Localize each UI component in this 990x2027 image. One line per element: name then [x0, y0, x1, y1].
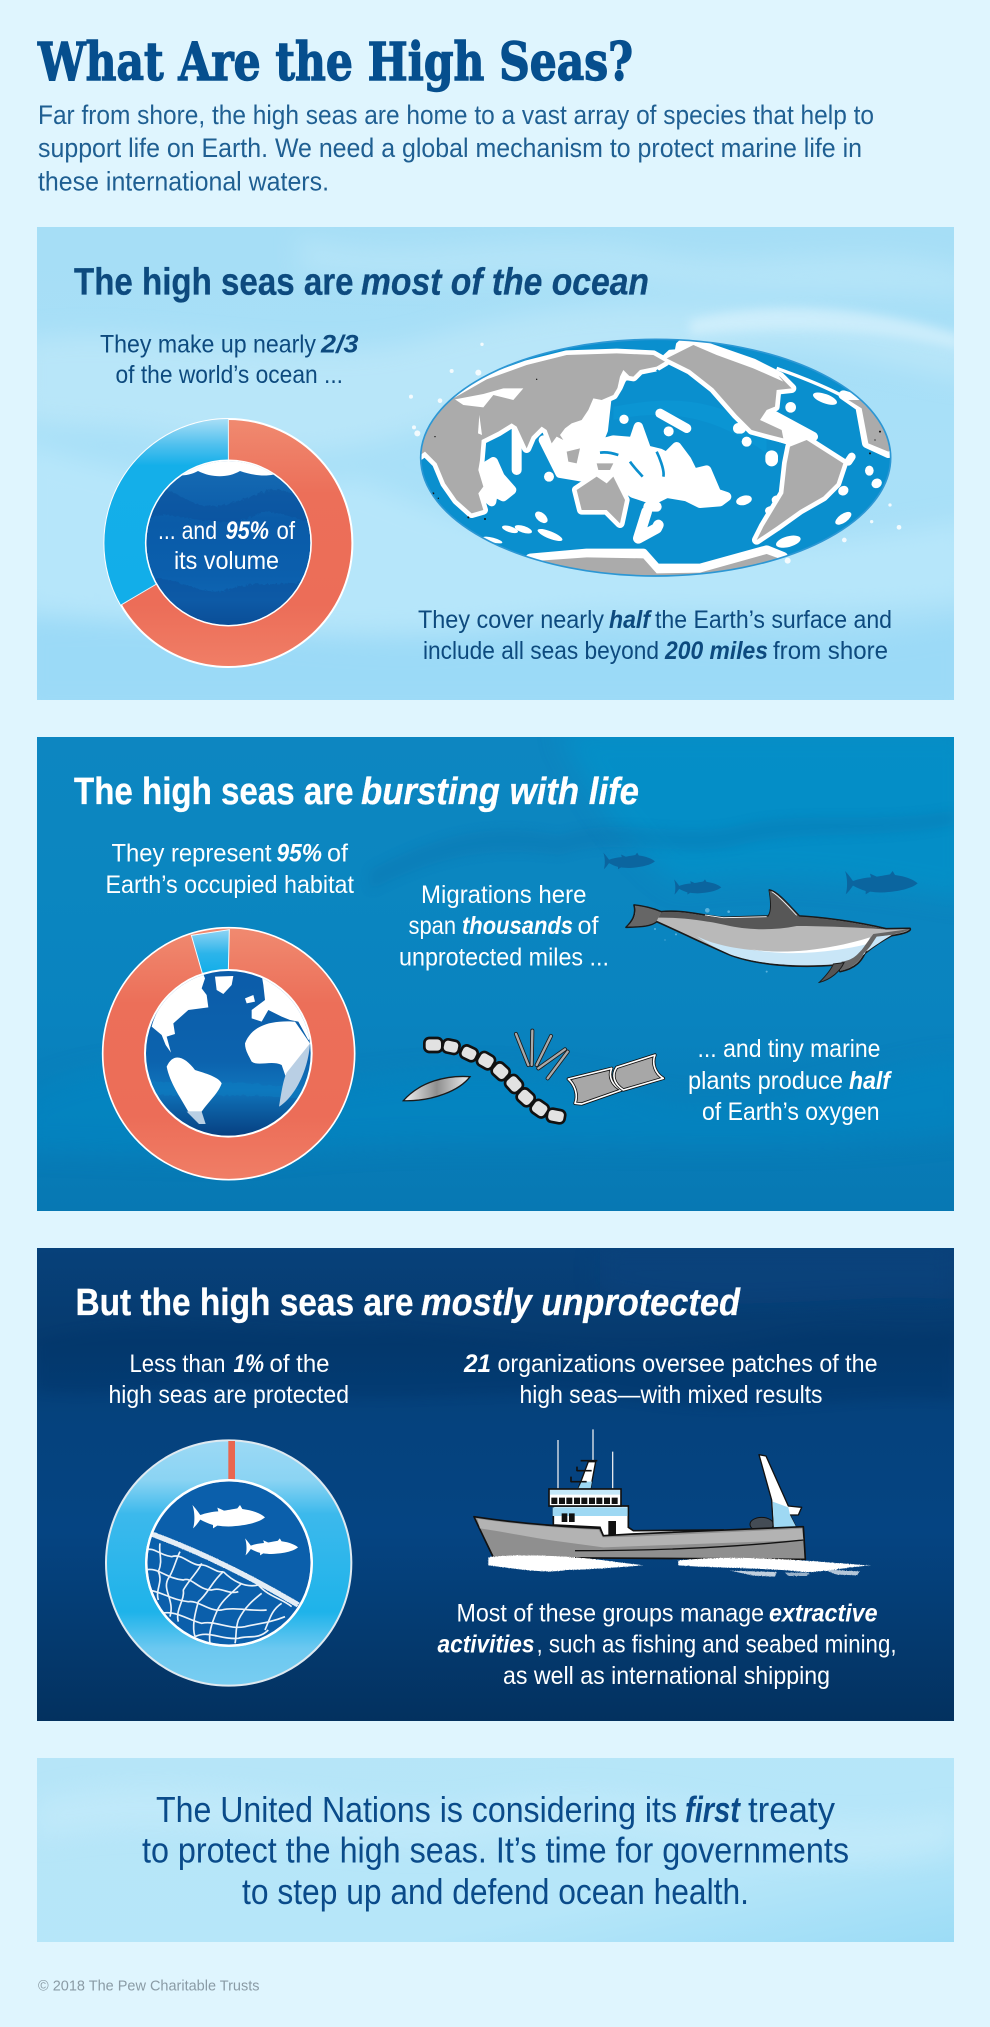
text: two thirds [100, 330, 359, 389]
text: less than 1%: high seas are protected [108, 1381, 349, 1409]
intro text [38, 100, 874, 196]
text: volume: its volume [174, 547, 279, 575]
text: occupied habitat [106, 840, 354, 899]
text: volume: 95% [226, 517, 269, 545]
text: extractive activities: extractive [769, 1600, 878, 1628]
text: tiny marine plants: of Earth’s oxygen [702, 1098, 880, 1126]
text: extractive activities: , such as fishing and seabed mining, [536, 1630, 896, 1658]
text: half the surface: from shore [773, 637, 888, 665]
panel: most of the ocean [20, 227, 970, 710]
diatom chain [424, 1038, 566, 1124]
text: tiny marine plants: half [849, 1067, 892, 1095]
antennas [558, 1429, 613, 1488]
treaty text: first [685, 1789, 742, 1830]
donut chart: two thirds of ocean [104, 419, 352, 667]
text: two thirds: 2/3 [320, 330, 359, 358]
text: migrations [399, 881, 609, 972]
text: volume [158, 517, 295, 575]
icon: dolphin [626, 890, 910, 982]
superstructure [549, 1489, 725, 1536]
text: half the surface: They cover nearly [418, 606, 604, 634]
icon: tuna silhouettes [603, 853, 918, 894]
text: less than 1%: of the [270, 1350, 330, 1378]
text: half the surface: the Earth’s surface and [655, 606, 892, 634]
text: less than 1% [108, 1350, 349, 1409]
heading: bursting with life [361, 771, 639, 813]
title: What Are the High Seas? [37, 32, 633, 93]
text: occupied habitat: Earth’s occupied habitat [106, 871, 354, 899]
icon: phytoplankton [403, 1031, 663, 1124]
heading: most of the ocean [361, 262, 649, 304]
needle diatoms [516, 1031, 568, 1078]
donut chart with globe [103, 928, 355, 1180]
panel: call to action [37, 1758, 954, 1942]
Pacific and Asian island blobs [595, 427, 727, 503]
heading: But the high seas are [76, 1282, 414, 1324]
net [145, 1543, 292, 1643]
text: migrations: unprotected miles ... [399, 944, 609, 972]
heading: The high seas are [74, 771, 354, 813]
text: extractive activities: as well as international shipping [503, 1662, 830, 1690]
treaty text: to step up and defend ocean health. [242, 1871, 749, 1912]
barrel diatom [568, 1055, 663, 1104]
text: half the surface [418, 606, 892, 665]
text: 21 organizations [463, 1350, 878, 1409]
crane [750, 1455, 802, 1531]
text: less than 1%: 1% [234, 1350, 264, 1378]
heading [76, 1282, 741, 1324]
text: occupied habitat: They represent [112, 840, 272, 868]
text: half the surface: half [609, 606, 652, 634]
footer credit: © 2018 The Pew Charitable Trusts [38, 1978, 260, 1994]
text: volume: ... and [158, 517, 217, 545]
intro text: these international waters. [38, 166, 329, 196]
treaty text [142, 1789, 849, 1912]
treaty text: The United Nations is considering its [156, 1789, 677, 1830]
text: tiny marine plants [688, 1035, 892, 1126]
text: extractive activities [438, 1600, 896, 1690]
treaty text: treaty [748, 1789, 835, 1830]
text: less than 1%: Less than [130, 1350, 226, 1378]
text: extractive activities: activities [438, 1630, 535, 1658]
text: occupied habitat: 95% [276, 840, 322, 868]
hull [474, 1517, 805, 1559]
text: volume: of [276, 517, 295, 545]
text: extractive activities: Most of these groups manage [456, 1600, 764, 1628]
text: tiny marine plants: plants produce [688, 1067, 843, 1095]
donut chart with net [106, 1440, 351, 1686]
heading: The high seas are [74, 262, 354, 304]
text: two thirds: They make up nearly [100, 330, 316, 358]
tuna [192, 1505, 298, 1555]
treaty text: to protect the high seas. It’s time for governments [142, 1830, 849, 1870]
intro text: Far from shore, the high seas are home to a vast array of species that help to [38, 100, 874, 130]
text: 21 organizations: high seas—with mixed results [520, 1381, 822, 1409]
foam [488, 1555, 872, 1577]
text: two thirds: of the world’s ocean ... [116, 361, 343, 389]
text: occupied habitat: of [327, 840, 348, 868]
text: migrations: thousands [462, 912, 573, 940]
heading: mostly unprotected [421, 1282, 741, 1324]
text: migrations: span [408, 912, 456, 940]
panel: bursting with life [20, 730, 970, 1211]
icon: fishing ship [474, 1429, 872, 1577]
text: 21 organizations: organizations oversee patches of the [498, 1350, 878, 1378]
intro text: support life on Earth. We need a global mechanism to protect marine life in [38, 133, 862, 163]
text: migrations: Migrations here [421, 881, 586, 909]
text: migrations: of [578, 912, 599, 940]
text: half the surface: include all seas beyond [423, 637, 659, 665]
text: tiny marine plants: ... and tiny marine [698, 1035, 880, 1063]
mast [571, 1461, 597, 1488]
heading [74, 771, 639, 813]
lens diatom [403, 1076, 470, 1101]
text: 21 organizations: 21 [463, 1350, 491, 1378]
text: half the surface: 200 miles [664, 637, 768, 665]
map: high seas world map [409, 339, 901, 583]
panel: mostly unprotected [37, 1248, 954, 1721]
heading [74, 262, 649, 304]
